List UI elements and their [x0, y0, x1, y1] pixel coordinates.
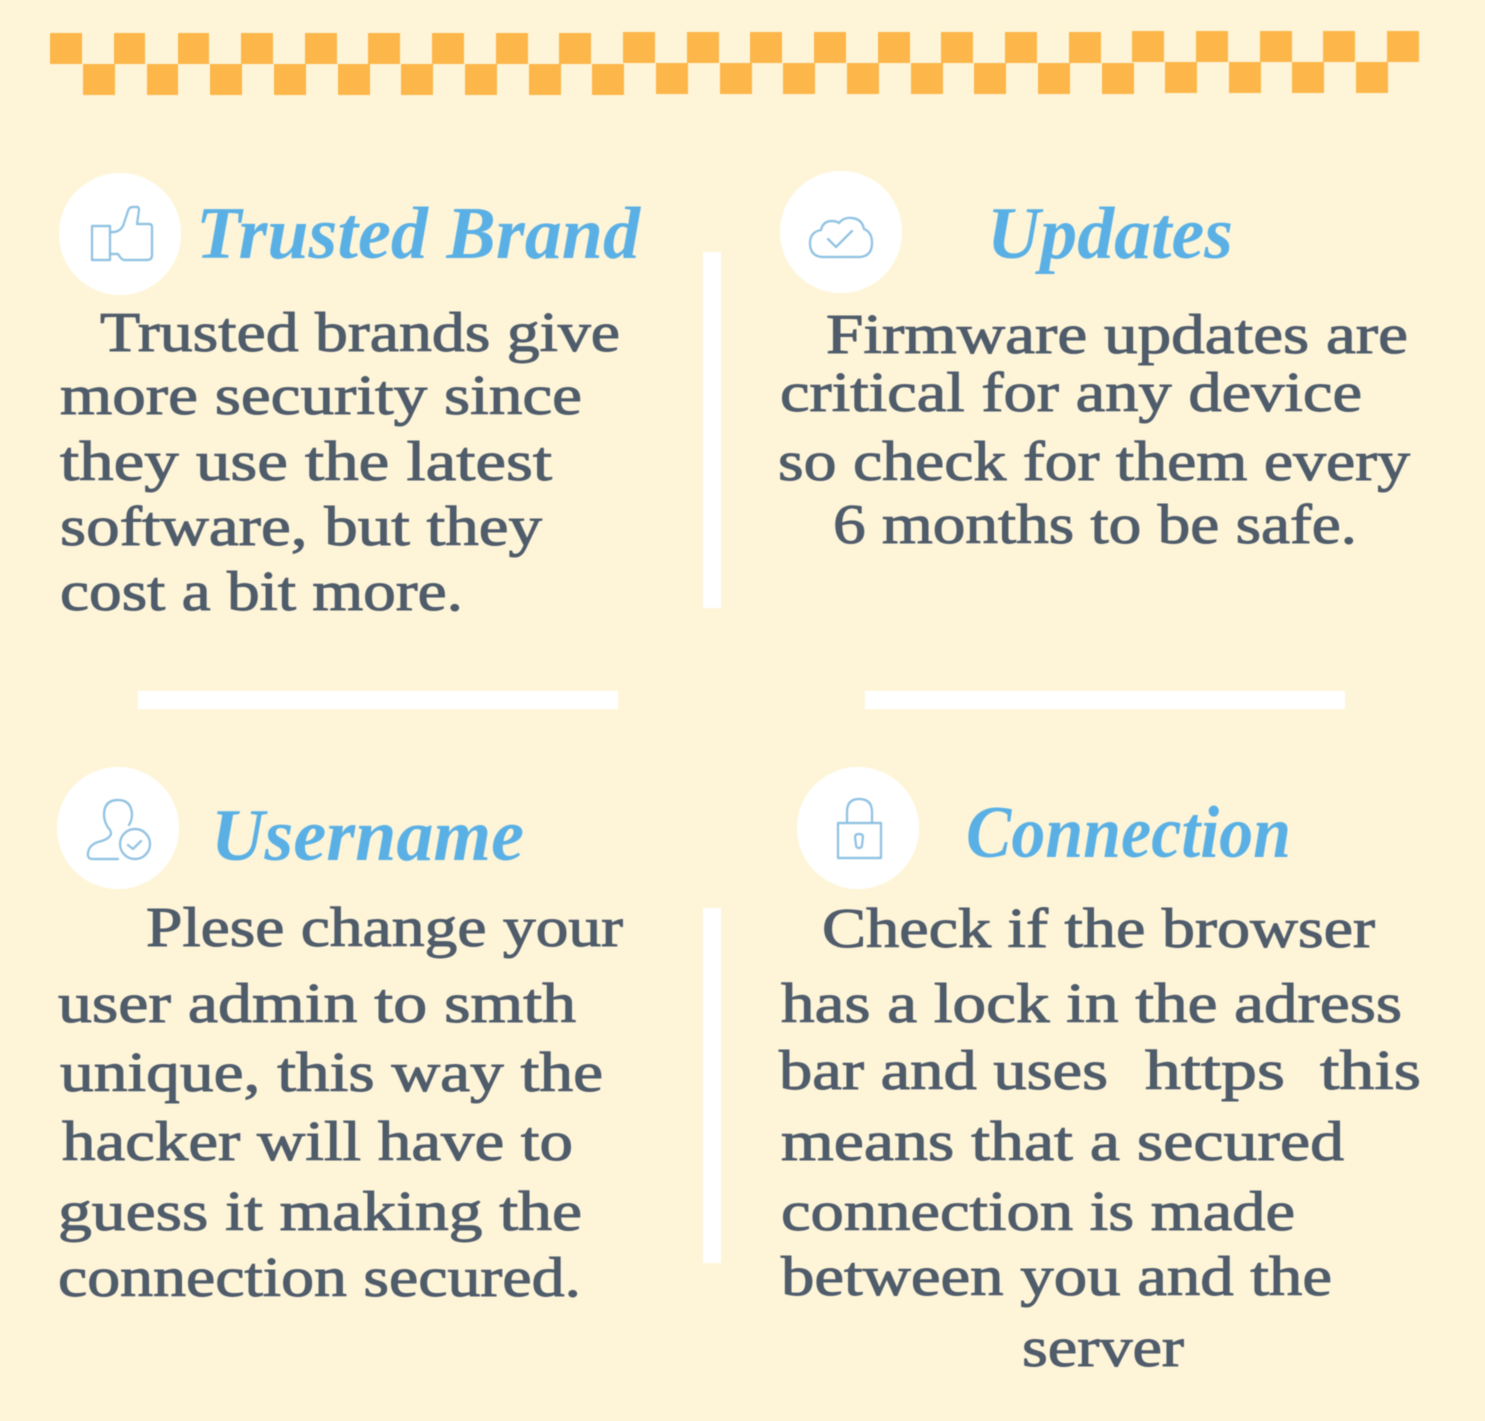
icon: user with check — [57, 767, 179, 889]
text block: username: user admin to smth — [58, 973, 576, 1035]
heading: Updates: Updates — [987, 193, 1233, 275]
text block: username: guess it making the — [58, 1181, 582, 1243]
text block: updates: so check for them every — [778, 431, 1410, 493]
icon: cloud with check — [780, 171, 902, 293]
text block: username: hacker will have to — [62, 1111, 573, 1173]
white divider bars — [138, 252, 1345, 1263]
panel: connection — [779, 767, 1421, 1379]
text block: username — [58, 897, 623, 1309]
checkered orange band — [50, 31, 1419, 95]
text block: trusted brand — [60, 302, 620, 623]
icon: padlock — [797, 767, 919, 889]
text block: updates — [778, 304, 1410, 556]
text block: trusted brand: more security since — [60, 365, 582, 427]
text block: connection: between you and the — [781, 1246, 1332, 1308]
text block: connection — [779, 898, 1421, 1379]
text block: updates: 6 months to be safe. — [833, 494, 1357, 556]
text block: trusted brand: Trusted brands give — [100, 302, 620, 364]
text block: connection: Check if the browser — [822, 898, 1375, 960]
text block: connection: this — [1320, 1040, 1421, 1102]
text block: username: connection secured. — [58, 1247, 581, 1309]
text block: username: Plese change your — [146, 897, 623, 959]
panel: trusted brand — [59, 173, 641, 623]
text block: connection: server — [1022, 1317, 1184, 1379]
text block: connection: connection is made — [781, 1181, 1295, 1243]
text block: connection: https — [1145, 1040, 1285, 1102]
text block: updates: critical for any device — [780, 362, 1362, 424]
heading: Connection: Connection — [966, 792, 1291, 874]
heading: Username: Username — [211, 795, 524, 877]
text block: connection: bar and uses — [779, 1040, 1108, 1102]
icon: thumbs up — [59, 173, 181, 295]
text block: username: unique, this way the — [60, 1042, 603, 1104]
panel: updates — [778, 171, 1410, 556]
text block: connection: means that a secured — [781, 1111, 1344, 1173]
text block: trusted brand: software, but they — [60, 496, 542, 558]
text block: connection: has a lock in the adress — [781, 973, 1402, 1035]
text block: trusted brand: cost a bit more. — [60, 561, 463, 623]
heading: Trusted Brand: Trusted Brand — [196, 193, 641, 275]
text block: updates: Firmware updates are — [826, 304, 1408, 366]
text block: trusted brand: they use the latest — [60, 431, 553, 493]
panel: username — [57, 767, 623, 1309]
